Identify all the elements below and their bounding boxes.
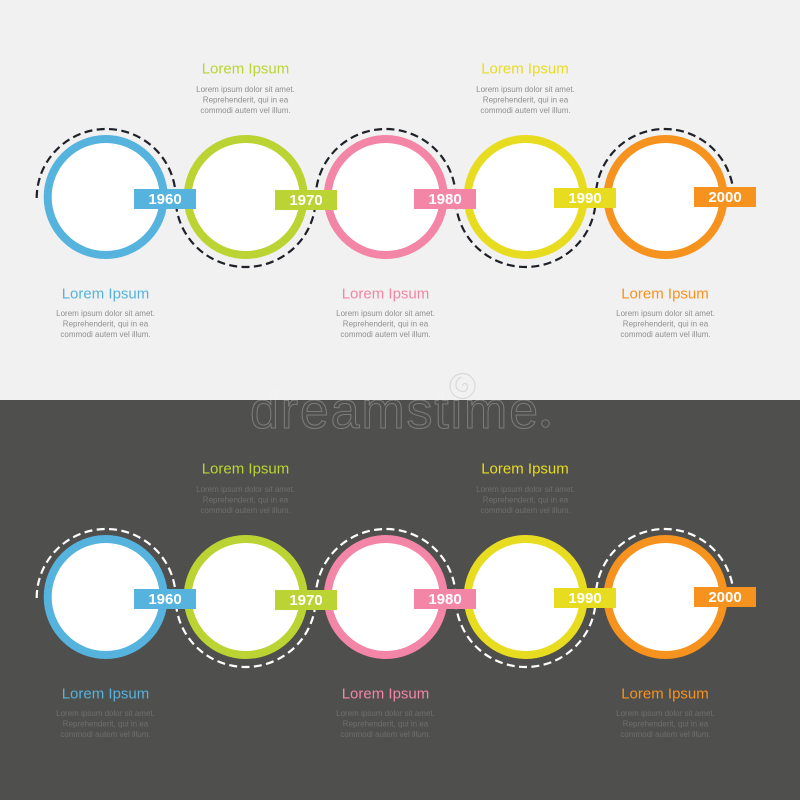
watermark bbox=[250, 374, 549, 440]
text block: bottom blue: Lorem Ipsum bbox=[62, 686, 149, 702]
text block: top yellow: Reprehenderit, qui in ea bbox=[483, 96, 569, 104]
circle: 2000 bbox=[608, 539, 724, 655]
year tag: 1980 bbox=[414, 589, 476, 609]
year tag: 1980: 1980 bbox=[428, 191, 462, 208]
text block: top yellow: Lorem Ipsum bbox=[481, 60, 569, 78]
text block: bottom orange: Reprehenderit, qui in ea bbox=[623, 720, 709, 728]
text block: bottom pink: Reprehenderit, qui in ea bbox=[343, 720, 429, 728]
dashed wave line bbox=[37, 129, 734, 267]
text block: top green bbox=[196, 60, 295, 115]
text block: top green: Lorem Ipsum bbox=[202, 60, 289, 78]
text block: bottom blue bbox=[56, 286, 155, 339]
text block: top green: Reprehenderit, qui in ea bbox=[203, 496, 289, 504]
text block: bottom orange: Lorem Ipsum bbox=[621, 286, 709, 302]
text block: top yellow: Lorem ipsum dolor sit amet. bbox=[476, 85, 575, 94]
text block: bottom pink: commodi autem vel illum. bbox=[340, 730, 431, 739]
text block: bottom orange: Lorem Ipsum bbox=[621, 686, 709, 702]
circle: 1990 bbox=[468, 539, 584, 655]
year tag: 1980: 1980 bbox=[428, 591, 462, 608]
year tag: 1990 bbox=[554, 588, 616, 608]
watermark wordmark: dreamstime bbox=[250, 382, 538, 440]
text block: top green bbox=[196, 460, 295, 515]
text block: bottom orange: Reprehenderit, qui in ea bbox=[623, 320, 709, 328]
text block: bottom pink: Lorem Ipsum bbox=[342, 286, 429, 302]
year tag: 2000: 2000 bbox=[708, 189, 742, 206]
text block: bottom orange: Lorem ipsum dolor sit amet. bbox=[616, 309, 715, 318]
year tag: 1970 bbox=[275, 190, 337, 210]
circle: 1990 bbox=[468, 139, 584, 255]
year tag: 2000: 2000 bbox=[708, 589, 742, 606]
text block: bottom pink bbox=[336, 686, 435, 739]
text block: top green: Lorem ipsum dolor sit amet. bbox=[196, 85, 295, 94]
circle: 1970 bbox=[188, 539, 304, 655]
text block: top yellow: commodi autem vel illum. bbox=[480, 106, 571, 115]
text block: bottom orange bbox=[616, 286, 715, 339]
circle: 1960 bbox=[48, 539, 164, 655]
text block: bottom orange: commodi autem vel illum. bbox=[620, 730, 711, 739]
text block: bottom blue: Lorem ipsum dolor sit amet. bbox=[56, 309, 155, 318]
dashed wave line bbox=[37, 529, 734, 667]
text block: top yellow bbox=[476, 60, 575, 115]
text block: bottom pink bbox=[336, 286, 435, 339]
text block: top yellow: Lorem ipsum dolor sit amet. bbox=[476, 485, 575, 494]
text block: top yellow: Lorem Ipsum bbox=[481, 460, 569, 478]
year tag: 1980 bbox=[414, 189, 476, 209]
icon: watermark spiral bbox=[450, 374, 475, 398]
text block: top yellow bbox=[476, 460, 575, 515]
circle: 1970 bbox=[188, 139, 304, 255]
year tag: 1960 bbox=[134, 189, 196, 209]
text block: bottom orange bbox=[616, 686, 715, 739]
text block: bottom blue: Reprehenderit, qui in ea bbox=[63, 720, 149, 728]
panel: light timeline bbox=[37, 60, 756, 339]
text block: bottom blue: Reprehenderit, qui in ea bbox=[63, 320, 149, 328]
text block: bottom blue: Lorem ipsum dolor sit amet. bbox=[56, 709, 155, 718]
year tag: 1990: 1990 bbox=[568, 590, 602, 607]
year tag: 1960: 1960 bbox=[148, 591, 182, 608]
year tag: 1970: 1970 bbox=[289, 192, 323, 209]
circle: 2000 bbox=[608, 139, 724, 255]
text block: top green: Lorem Ipsum bbox=[202, 460, 289, 478]
year tag: 1960: 1960 bbox=[148, 191, 182, 208]
circle: 1980 bbox=[328, 139, 444, 255]
text block: top green: Reprehenderit, qui in ea bbox=[203, 96, 289, 104]
text block: bottom blue bbox=[56, 686, 155, 739]
icon: registered mark bbox=[542, 420, 549, 427]
year tag: 1970 bbox=[275, 590, 337, 610]
text block: top green: commodi autem vel illum. bbox=[200, 106, 291, 115]
text block: bottom orange: commodi autem vel illum. bbox=[620, 330, 711, 339]
text block: bottom pink: Lorem Ipsum bbox=[342, 686, 429, 702]
circle: 1980 bbox=[328, 539, 444, 655]
year tag: 1990: 1990 bbox=[568, 190, 602, 207]
text block: bottom pink: Lorem ipsum dolor sit amet. bbox=[336, 309, 435, 318]
panel: dark timeline bbox=[37, 460, 756, 739]
year tag: 1990 bbox=[554, 188, 616, 208]
text block: top green: commodi autem vel illum. bbox=[200, 506, 291, 515]
year tag: 1960 bbox=[134, 589, 196, 609]
text block: top yellow: commodi autem vel illum. bbox=[480, 506, 571, 515]
year tag: 2000 bbox=[694, 187, 756, 207]
text block: bottom pink: Lorem ipsum dolor sit amet. bbox=[336, 709, 435, 718]
text block: bottom pink: Reprehenderit, qui in ea bbox=[343, 320, 429, 328]
text block: bottom pink: commodi autem vel illum. bbox=[340, 330, 431, 339]
text block: bottom orange: Lorem ipsum dolor sit amet. bbox=[616, 709, 715, 718]
text block: bottom blue: commodi autem vel illum. bbox=[60, 730, 151, 739]
year tag: 2000 bbox=[694, 587, 756, 607]
year tag: 1970: 1970 bbox=[289, 592, 323, 609]
text block: bottom blue: commodi autem vel illum. bbox=[60, 330, 151, 339]
text block: top green: Lorem ipsum dolor sit amet. bbox=[196, 485, 295, 494]
text block: top yellow: Reprehenderit, qui in ea bbox=[483, 496, 569, 504]
text block: bottom blue: Lorem Ipsum bbox=[62, 286, 149, 302]
circle: 1960 bbox=[48, 139, 164, 255]
